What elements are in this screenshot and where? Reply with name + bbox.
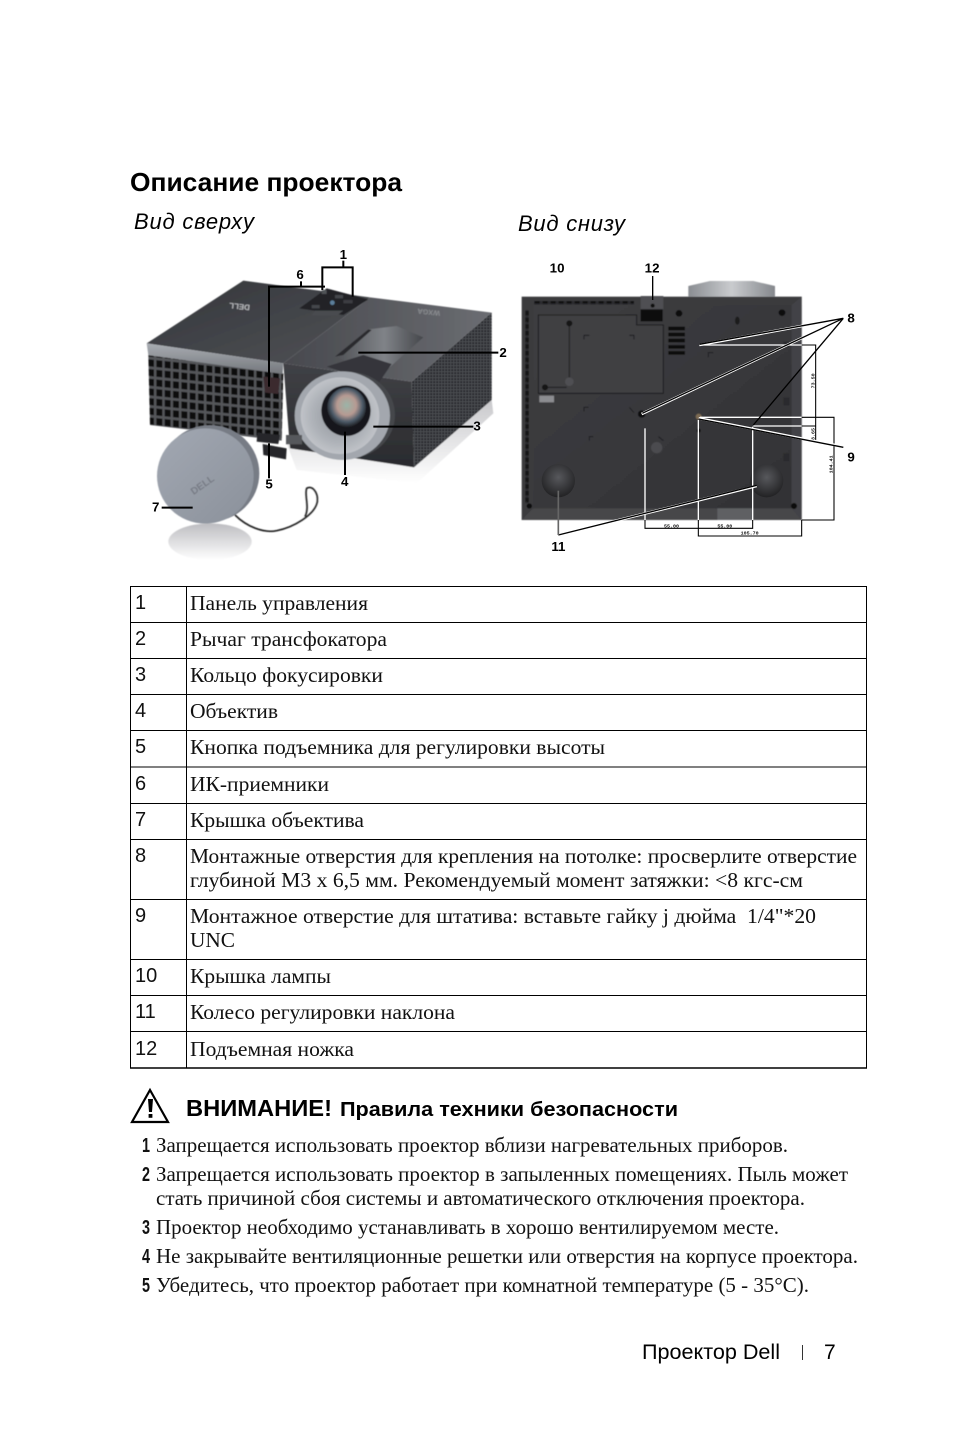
heading: warning — [186, 1095, 678, 1121]
lens cap: DELL — [189, 474, 217, 498]
safety item 5: Убедитесь, что проектор работает при комнатной температуре (5 - 35°C). — [156, 1273, 809, 1297]
row 8: 8 — [135, 845, 146, 867]
row 12: Подъемная ножка — [190, 1037, 355, 1061]
callout numbers: 3 — [473, 419, 481, 434]
dimension numbers: 73.50 — [811, 373, 817, 388]
row 3: Кольцо фокусировки — [190, 663, 383, 687]
safety item 2: стать причиной сбоя системы и автоматического отключения проектора. — [156, 1186, 805, 1210]
callout numbers: 9 — [847, 449, 855, 464]
icon: warning triangle — [132, 1090, 168, 1122]
row 9: 9 — [135, 905, 146, 927]
row 9 — [135, 904, 816, 952]
safety item 2: Запрещается использовать проектор в запыленных помещениях. Пыль может — [156, 1162, 848, 1186]
callout numbers: 10 — [550, 261, 564, 276]
row 6: ИК-приемники — [190, 772, 329, 796]
callout numbers: 11 — [551, 539, 566, 554]
row 6: 6 — [135, 773, 146, 795]
safety item 3: 3 — [142, 1217, 150, 1239]
row 2: Рычаг трансфокатора — [190, 627, 388, 651]
heading: warning: ВНИМАНИЕ! — [186, 1095, 332, 1121]
callout lines — [558, 276, 843, 535]
footer: page label and number — [642, 1341, 836, 1364]
safety item 4: 4 — [142, 1246, 151, 1268]
lens cap — [157, 425, 317, 560]
illustration: projector top view: WXGA — [416, 306, 441, 318]
row 2: 2 — [135, 628, 146, 650]
callout numbers: 8 — [847, 310, 855, 325]
row 5: 5 — [135, 736, 146, 758]
row 9: UNC — [190, 928, 235, 952]
footer: page label and number: 7 — [824, 1341, 836, 1364]
row 8: глубиной М3 х 6,5 мм. Рекомендуемый момент затяжки: <8 кгс-см — [190, 868, 803, 892]
dimension numbers: 55.00 — [717, 523, 732, 529]
illustration: projector top view — [147, 247, 507, 560]
row 6 — [135, 772, 329, 796]
dimension numbers: 8.65 — [811, 428, 817, 440]
row 1: Панель управления — [190, 591, 368, 615]
row 8 — [135, 844, 857, 892]
row 11: Колесо регулировки наклона — [190, 1000, 456, 1024]
row 10: Крышка лампы — [190, 964, 331, 988]
row 7: Крышка объектива — [190, 808, 365, 832]
callout numbers — [152, 247, 507, 514]
callout numbers: 5 — [265, 477, 273, 492]
row 1: 1 — [135, 592, 146, 614]
dimension numbers: 55.00 — [664, 523, 679, 529]
title: Описание проектора — [130, 167, 403, 197]
row 5: Кнопка подъемника для регулировки высоты — [190, 735, 605, 759]
row 12: 12 — [135, 1038, 157, 1060]
safety item 2 — [142, 1162, 848, 1210]
callout numbers: 2 — [499, 345, 507, 360]
dimension numbers: 105.70 — [741, 531, 759, 537]
safety item 5: 5 — [142, 1275, 150, 1297]
row 9: Монтажное отверстие для штатива: вставьте гайку j дюйма 1/4"*20 — [190, 904, 816, 928]
row 8: Монтажные отверстия для крепления на потолке: просверлите отверстие — [190, 844, 857, 868]
heading: bottom view: Вид снизу — [518, 211, 627, 236]
illustration: projector bottom view — [522, 261, 855, 554]
safety item 4: Не закрывайте вентиляционные решетки или отверстия на корпусе проектора. — [156, 1244, 858, 1268]
heading: warning: Правила техники безопасности — [340, 1099, 678, 1121]
table: parts list — [130, 586, 867, 1068]
row 11: 11 — [135, 1001, 156, 1023]
safety item 1: Запрещается использовать проектор вблизи нагревательных приборов. — [156, 1133, 788, 1157]
dimension numbers — [664, 373, 835, 537]
callout lines — [162, 261, 498, 508]
row 4: 4 — [135, 700, 146, 722]
callout numbers: 6 — [296, 267, 304, 282]
callout numbers: 7 — [152, 499, 159, 514]
callout numbers: 12 — [645, 261, 659, 276]
row 4: Объектив — [190, 699, 278, 723]
heading: top view: Вид сверху — [134, 209, 256, 234]
safety item 2: 2 — [142, 1164, 150, 1186]
row 3: 3 — [135, 664, 146, 686]
row 4 — [135, 699, 278, 723]
safety item 3: Проектор необходимо устанавливать в хорошо вентилируемом месте. — [156, 1215, 779, 1239]
row 7: 7 — [135, 809, 146, 831]
safety item 1: 1 — [142, 1135, 150, 1157]
callout numbers — [550, 261, 855, 554]
dimension numbers: 104.41 — [829, 455, 835, 473]
callout numbers: 4 — [341, 474, 349, 489]
row 10: 10 — [135, 965, 157, 987]
footer: page label and number: Проектор Dell — [642, 1341, 780, 1364]
dimension lines — [645, 345, 803, 520]
adjustment wheels — [542, 464, 783, 497]
callout numbers: 1 — [340, 247, 348, 262]
illustration: projector top view: DELL — [229, 301, 250, 312]
